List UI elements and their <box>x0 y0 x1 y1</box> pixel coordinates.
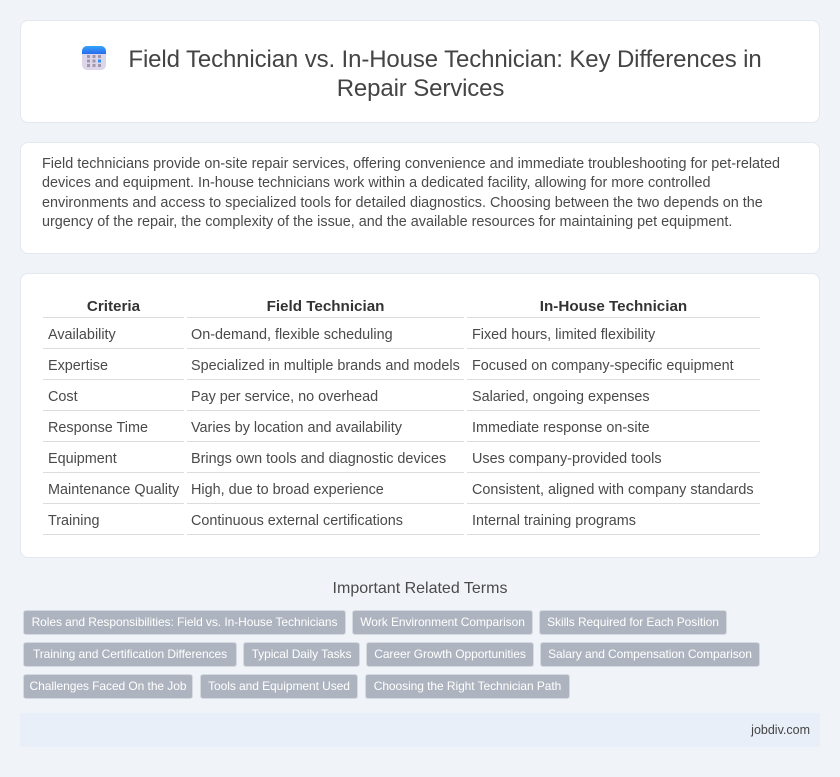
comparison table: Brings own tools and diagnostic devices <box>191 451 446 467</box>
related terms tags: Skills Required for Each Position <box>547 615 719 629</box>
comparison table: Internal training programs <box>472 513 636 529</box>
intro paragraph: Field technicians provide on-site repair services, offering convenience and immediate troubleshooting for pet-related <box>42 156 780 172</box>
related terms tags: Salary and Compensation Comparison <box>548 647 752 661</box>
related terms tags: Work Environment Comparison <box>360 615 525 629</box>
comparison table: Varies by location and availability <box>191 420 402 436</box>
footer source text: jobdiv.com <box>751 723 810 737</box>
comparison table: Fixed hours, limited flexibility <box>472 327 655 343</box>
related terms tags: Career Growth Opportunities <box>374 647 526 661</box>
related terms tags <box>23 610 760 699</box>
comparison table: Response Time <box>48 420 148 436</box>
comparison table: Equipment <box>48 451 117 467</box>
intro paragraph: environments and access to specialized tools for detailed diagnostics. Choosing between the two depends on the <box>42 195 763 211</box>
related terms tags: Typical Daily Tasks <box>252 647 351 661</box>
comparison table: Availability <box>48 327 116 343</box>
comparison table: Specialized in multiple brands and models <box>191 358 460 374</box>
panel: title <box>20 20 820 123</box>
comparison table: Expertise <box>48 358 108 374</box>
intro paragraph: urgency of the repair, the complexity of the issue, and the available resources for maintaining pet equipment. <box>42 214 732 230</box>
comparison table: Cost <box>48 389 78 405</box>
related terms tags: Tools and Equipment Used <box>208 679 350 693</box>
related terms tags: Roles and Responsibilities: Field vs. In-House Technicians <box>32 615 337 629</box>
intro paragraph: devices and equipment. In-house technicians work within a dedicated facility, allowing for more controlled <box>42 175 710 191</box>
comparison table: Training <box>48 513 99 529</box>
comparison table <box>43 298 760 535</box>
comparison table: Pay per service, no overhead <box>191 389 378 405</box>
icon: calendar <box>82 46 106 70</box>
comparison table: Consistent, aligned with company standards <box>472 482 754 498</box>
comparison table: Immediate response on-site <box>472 420 650 436</box>
related terms tags: Training and Certification Differences <box>33 647 227 661</box>
comparison table: Salaried, ongoing expenses <box>472 389 650 405</box>
comparison table: Focused on company-specific equipment <box>472 358 734 374</box>
comparison table: On-demand, flexible scheduling <box>191 327 393 343</box>
title text <box>128 46 762 102</box>
footer bar <box>20 713 820 747</box>
comparison table: Maintenance Quality <box>48 482 179 498</box>
header: Criteria: Criteria <box>87 298 140 315</box>
title text: Repair Services <box>337 75 504 102</box>
comparison table: High, due to broad experience <box>191 482 384 498</box>
comparison table: Continuous external certifications <box>191 513 403 529</box>
panel: comparison table <box>20 273 820 558</box>
intro paragraph <box>42 156 780 230</box>
title text: Field Technician vs. In-House Technician: Key Differences in <box>128 46 762 73</box>
header: Field Technician: Field Technician <box>267 298 384 315</box>
panel: intro text <box>20 142 820 254</box>
related terms tags: Challenges Faced On the Job <box>30 679 186 693</box>
heading: Important Related Terms: Important Related Terms <box>333 580 507 597</box>
header: In-House Technician: In-House Technician <box>540 298 687 315</box>
related terms tags: Choosing the Right Technician Path <box>374 679 561 693</box>
comparison table: Uses company-provided tools <box>472 451 662 467</box>
